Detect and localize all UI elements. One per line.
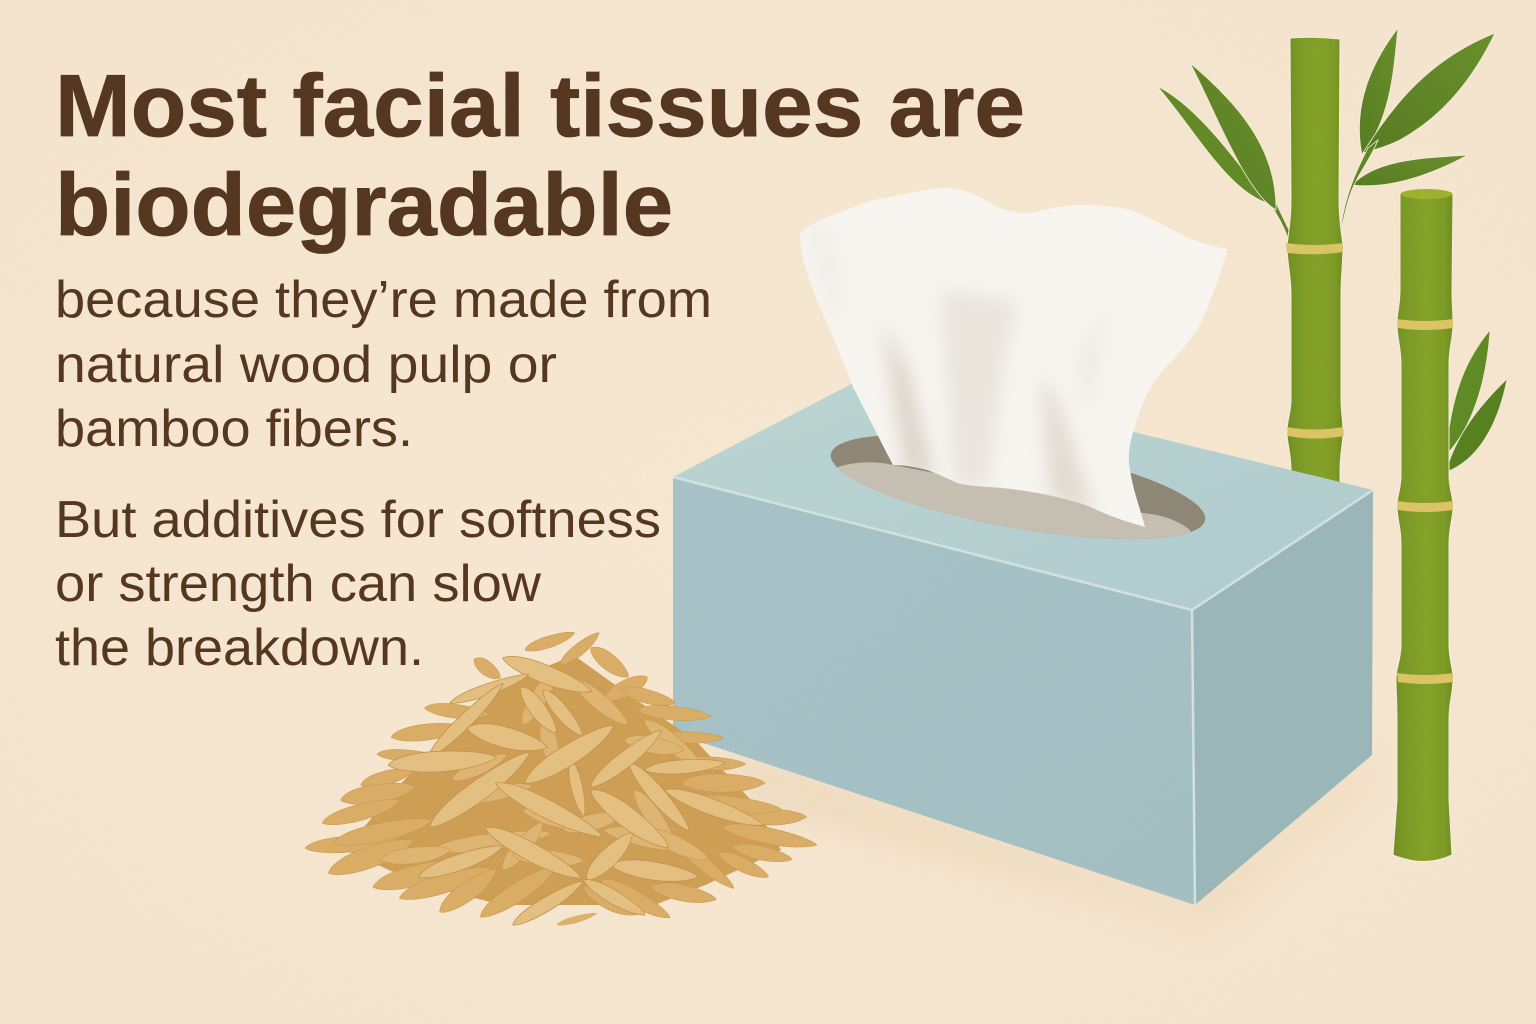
inner fibers [380, 665, 712, 875]
tissue sheet [800, 188, 1228, 527]
bamboo leaves left [1157, 63, 1291, 238]
text block: additives: the breakdown. [55, 619, 424, 677]
text block: natural materials: because they’re made from [55, 271, 712, 329]
title [55, 56, 1025, 254]
title: biodegradable [55, 155, 673, 254]
text block: additives: or strength can slow [55, 555, 541, 613]
bamboo leaves right [1341, 28, 1495, 226]
pile base [346, 655, 781, 905]
bamboo leaves lower [1446, 330, 1507, 472]
edge fibers [304, 628, 818, 925]
box front face [673, 477, 1195, 905]
tissue opening [830, 436, 1206, 540]
box right face [1192, 490, 1373, 905]
short bamboo stalk with leaves [1393, 189, 1507, 862]
tissue box [673, 188, 1373, 905]
tall stalk body [1287, 37, 1343, 490]
stalk cut top [1400, 189, 1452, 199]
text block: additives: But additives for softness [55, 491, 661, 549]
box edge highlights [673, 477, 1373, 905]
node ring [1397, 319, 1453, 330]
pile of wood pulp fibers [304, 628, 818, 931]
short stalk body [1393, 190, 1453, 862]
text block: natural materials [55, 271, 712, 458]
node ring [1397, 501, 1453, 512]
box top face [673, 370, 1373, 610]
node ring [1287, 427, 1344, 438]
text block: additives [55, 491, 661, 677]
tall bamboo stalk with leaves [1157, 28, 1495, 490]
text block: natural materials: natural wood pulp or [55, 336, 557, 394]
node ring [1397, 673, 1453, 684]
stray fiber [555, 910, 598, 928]
node ring [1286, 243, 1343, 254]
ground shadow [700, 745, 1372, 925]
title: Most facial tissues are [55, 56, 1025, 155]
text block: natural materials: bamboo fibers. [55, 400, 413, 458]
front fibers [387, 649, 766, 931]
